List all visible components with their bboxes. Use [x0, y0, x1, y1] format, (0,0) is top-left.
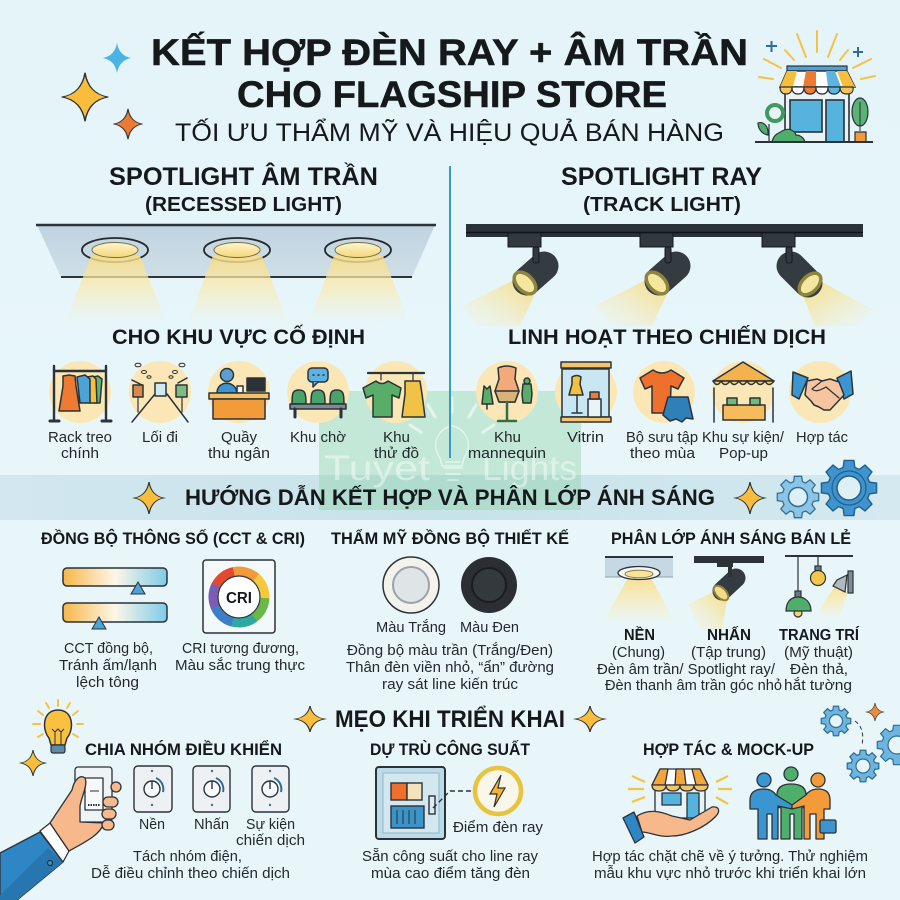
- text: control note: Tách nhóm điện,: [133, 848, 242, 865]
- labels: campaign zones: Khu: [494, 429, 521, 446]
- labels: campaign zones: Hợp tác: [796, 429, 848, 446]
- text: layer names: NHẤN: [707, 627, 751, 644]
- labels: fixed zones: chính: [61, 445, 99, 462]
- illustration: track lights: [462, 224, 874, 326]
- text: power note: mùa cao điểm tăng đèn: [371, 865, 530, 882]
- heading: tips: MẸO KHI TRIỂN KHAI: [335, 705, 565, 733]
- icon: band sparkles: [134, 482, 765, 514]
- title: [151, 31, 748, 115]
- band background: [0, 475, 900, 520]
- icon: decorative layer: [785, 556, 853, 620]
- text: CRI note: [175, 640, 306, 674]
- icon: accent layer: [688, 556, 764, 630]
- heading: power: DỰ TRÙ CÔNG SUẤT: [370, 740, 530, 759]
- text: aesthetics note: [346, 642, 554, 693]
- labels: campaign zones: Pop-up: [719, 445, 768, 462]
- icon: handshake: [792, 371, 853, 410]
- heading: spotlight am tran: (RECESSED LIGHT): [145, 193, 342, 216]
- divider line: [449, 166, 451, 458]
- text: layer descriptions: Đèn âm trần/ Spotlight ray/: [597, 661, 776, 678]
- labels: fixed zones: Quầy: [221, 429, 257, 446]
- icon: CRI ring: CRI: [226, 590, 252, 607]
- heading: layers: PHÂN LỚP ÁNH SÁNG BÁN LẺ: [611, 529, 851, 548]
- labels: dimmers: [139, 816, 305, 849]
- icon: gears: [777, 460, 877, 518]
- icon: fitting clothes: [363, 373, 425, 417]
- section: power reserve: [362, 740, 544, 882]
- text: collaboration note: Hợp tác chặt chẽ về ý tưởng. Thử nghiệm: [592, 848, 868, 865]
- text: aesthetics note: Thân đèn viền nhỏ, “ẩn” đường: [346, 659, 554, 676]
- text: layer names: NỀN: [624, 627, 655, 644]
- icon: electrical panel: [376, 767, 472, 839]
- icon: garment rack: [50, 366, 111, 421]
- icon: ambient layer: [602, 557, 676, 624]
- icon: shop in hand: [623, 769, 732, 843]
- subheading: co dinh: CHO KHU VỰC CỐ ĐỊNH: [112, 325, 365, 349]
- section: layers: [597, 529, 860, 694]
- heading: aesthetics: THẨM MỸ ĐỒNG BỘ THIẾT KẾ: [331, 528, 569, 548]
- chart: CCT gradient bars: [63, 568, 167, 629]
- text: layer names: (Chung): [612, 644, 665, 661]
- labels: fixed zones: Rack treo: [48, 429, 112, 446]
- text: CCT note: CCT đồng bộ,: [64, 640, 153, 657]
- icon: dimmers: [134, 766, 289, 812]
- heading: spotlight ray: [561, 163, 762, 216]
- text: CCT note: Tránh ấm/lạnh: [59, 657, 157, 674]
- labels: dimmers: Nền: [139, 816, 165, 833]
- labels: campaign zones: Khu sự kiện/: [702, 429, 785, 446]
- labels: dimmers: Sự kiện: [246, 816, 295, 833]
- labels: campaign zones: Vitrin: [567, 429, 604, 446]
- section: collaboration: [592, 740, 868, 882]
- labels: colours: Màu Đen: [460, 619, 519, 636]
- text: CRI note: CRI tương đương,: [182, 640, 299, 657]
- text: CRI note: Màu sắc trung thực: [175, 657, 306, 674]
- icon: seasonal collection: [640, 370, 693, 422]
- label: power point: Điểm đèn ray: [453, 819, 544, 836]
- labels: campaign zones: Bộ sưu tập: [626, 429, 698, 446]
- icon: black downlight: [461, 557, 517, 613]
- labels: campaign zones: theo mùa: [630, 445, 696, 462]
- icon: waiting seats: [290, 368, 346, 417]
- icon: display window: [561, 362, 611, 422]
- text: layer names: (Mỹ thuật): [784, 644, 853, 661]
- text: CCT note: [59, 640, 157, 691]
- heading: spotlight am tran: SPOTLIGHT ÂM TRẦN: [109, 161, 378, 191]
- icon: pop-up tent: [713, 362, 774, 422]
- labels: fixed zones: Khu chờ: [290, 429, 346, 446]
- text: CCT note: lệch tông: [76, 674, 139, 691]
- illustration: recessed ceiling lights: [36, 225, 436, 322]
- labels: fixed zones: Lối đi: [142, 429, 178, 446]
- text: collaboration note: mẫu khu vực nhỏ trước khi triển khai lớn: [594, 865, 866, 882]
- heading: spotlight ray: (TRACK LIGHT): [583, 193, 741, 216]
- heading: guide band: HƯỚNG DẪN KẾT HỢP VÀ PHÂN LỚP ÁNH SÁNG: [185, 484, 715, 510]
- title: CHO FLAGSHIP STORE: [237, 74, 667, 115]
- icon: light bulb: [33, 700, 83, 753]
- icon: mannequins: [482, 366, 532, 421]
- heading: spotlight ray: SPOTLIGHT RAY: [561, 163, 762, 191]
- heading: spotlight am tran: [109, 161, 378, 216]
- icon: hand on switch: [0, 767, 121, 900]
- text: aesthetics note: ray sát line kiến trúc: [382, 676, 519, 693]
- text: layer names: TRANG TRÍ: [779, 627, 860, 644]
- section: aesthetics: [331, 528, 569, 693]
- labels: dimmers: chiến dịch: [236, 832, 305, 849]
- text: layer descriptions: Đèn thả,: [790, 661, 848, 678]
- watermark: Tuyet: [324, 449, 430, 488]
- labels: fixed zones: [48, 429, 419, 462]
- text: layer descriptions: hắt tường: [784, 677, 852, 694]
- heading: collaboration: HỢP TÁC & MOCK-UP: [643, 740, 814, 759]
- watermark: [319, 391, 581, 510]
- icon: cashier: [209, 368, 269, 419]
- section: sync specs: [41, 528, 306, 691]
- text: aesthetics note: Đồng bộ màu trần (Trắng/Đen): [347, 642, 553, 659]
- text: layer descriptions: Đèn thanh âm trần góc nhỏ: [605, 677, 782, 694]
- icon: team: [750, 767, 836, 839]
- text: control note: Dễ điều chỉnh theo chiến dịch: [91, 865, 290, 882]
- labels: fixed zones: Khu: [383, 429, 410, 446]
- heading: CCT CRI: ĐỒNG BỘ THÔNG SỐ (CCT & CRI): [41, 528, 305, 548]
- text: power note: [362, 848, 538, 882]
- spotlight heads: [527, 266, 808, 283]
- icon: shop front with rays: [755, 31, 875, 142]
- heading: control groups: CHIA NHÓM ĐIỀU KHIỂN: [85, 740, 282, 759]
- labels: fixed zones: thử đồ: [374, 445, 419, 462]
- text: control note: [91, 848, 290, 882]
- labels: dimmers: Nhấn: [194, 816, 229, 833]
- labels: campaign zones: [468, 429, 848, 462]
- icon: tips sparkles: [21, 703, 884, 776]
- icon: CRI ring: [203, 560, 275, 633]
- watermark: Lights: [482, 449, 577, 488]
- text: layer descriptions: [597, 661, 852, 694]
- text: power note: Sẵn công suất cho line ray: [362, 848, 538, 865]
- icon backgrounds: [49, 361, 851, 423]
- section: control groups: [0, 740, 305, 900]
- icon: gears right: [821, 706, 900, 782]
- title: KẾT HỢP ĐÈN RAY + ÂM TRẦN: [151, 31, 748, 73]
- labels: campaign zones: mannequin: [468, 445, 546, 462]
- labels: fixed zones: thu ngân: [208, 445, 270, 462]
- subtitle: TỐI ƯU THẨM MỸ VÀ HIỆU QUẢ BÁN HÀNG: [175, 117, 724, 147]
- icon: sparkles left of title: [62, 43, 142, 139]
- labels: colours: Màu Trắng: [376, 619, 446, 636]
- labels: colours: [376, 619, 519, 636]
- text: layer names: (Tập trung): [691, 644, 766, 661]
- text: collaboration note: [592, 848, 868, 882]
- icon: power point: [475, 768, 521, 814]
- icon: white downlight: [383, 557, 439, 613]
- text: layer names: [612, 627, 860, 661]
- subheading: chien dich: LINH HOẠT THEO CHIẾN DỊCH: [508, 326, 826, 349]
- icon: aisle: [132, 363, 188, 422]
